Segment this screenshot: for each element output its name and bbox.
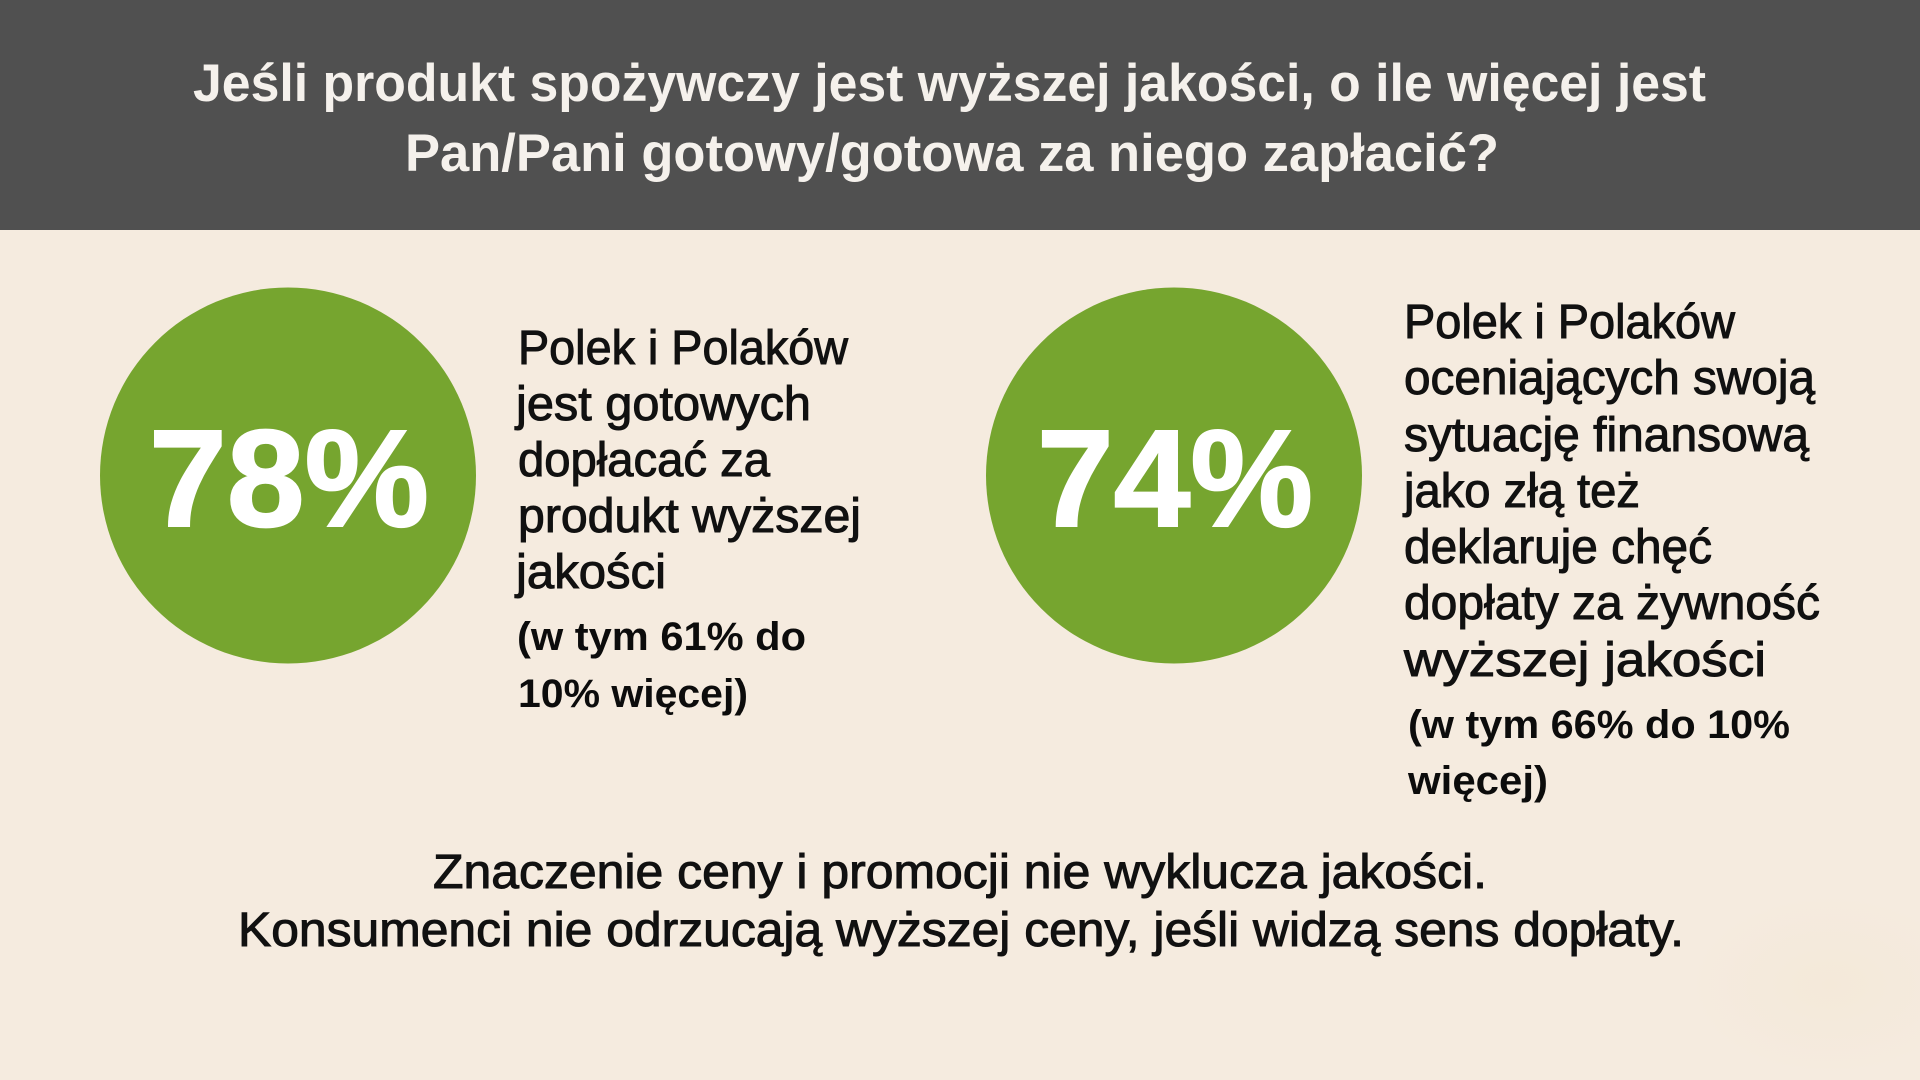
statistic circle: 78%: 78% [149,402,429,556]
statistic circle: 74%: 74% [1037,402,1313,556]
text block: 74% description [1402,296,1820,803]
text block: 78% description [514,322,861,716]
text block: 74% description: dopłaty za żywność [1404,577,1820,630]
note: 61%: (w tym 61% do [517,615,806,659]
text block: 74% description: wyższej jakości [1403,634,1766,687]
text block: 78% description: jakości [514,546,666,599]
text block: 74% description: deklaruje chęć [1404,521,1712,574]
note: 66% [1407,703,1790,803]
conclusion text [238,846,1684,957]
note: 66%: (w tym 66% do 10% [1408,703,1790,747]
statistic circle: 74% [986,288,1362,664]
title [193,54,1706,183]
statistic circle: 78% [100,288,476,664]
text block: 74% description: jako złą też [1402,465,1640,518]
note: 61% [517,615,806,716]
text block: 78% description: produkt wyższej [518,490,861,543]
conclusion text: Znaczenie ceny i promocji nie wyklucza jakości. [433,846,1487,899]
header band with title [0,0,1920,230]
text block: 78% description: dopłacać za [518,434,770,487]
text block: 78% description: jest gotowych [514,378,811,431]
text block: 74% description: oceniających swoją [1404,352,1815,405]
title: Pan/Pani gotowy/gotowa za niego zapłacić? [405,124,1499,183]
text block: 74% description: Polek i Polaków [1404,296,1735,349]
conclusion text: Konsumenci nie odrzucają wyższej ceny, jeśli widzą sens dopłaty. [238,904,1684,957]
text block: 78% description: Polek i Polaków [518,322,848,375]
note: 66%: więcej) [1407,759,1548,803]
title: Jeśli produkt spożywczy jest wyższej jakości, o ile więcej jest [193,54,1706,113]
note: 61%: 10% więcej) [518,672,748,716]
text block: 74% description: sytuację finansową [1404,409,1809,462]
